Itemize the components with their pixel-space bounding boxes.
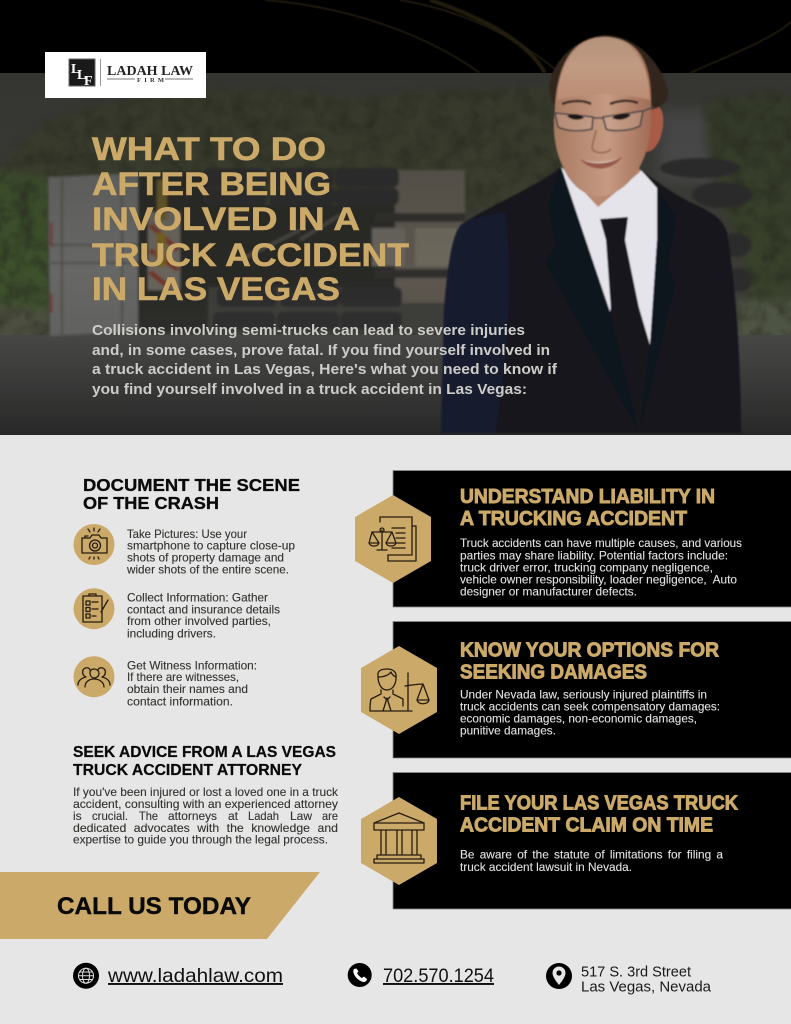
trailer rear doors — [48, 173, 140, 336]
text: seek advice body: The — [139, 809, 158, 823]
title: WHAT TO DO — [92, 131, 326, 167]
background photo: overturned truck — [0, 73, 791, 435]
neck — [564, 150, 640, 207]
icon: camera — [74, 524, 114, 565]
text: take pictures — [126, 527, 295, 576]
panel: hero — [0, 0, 791, 435]
heading: seeking damages: KNOW YOUR OPTIONS FOR — [460, 640, 720, 662]
heading: document the scene: OF THE CRASH — [83, 493, 219, 513]
intro paragraph: you find yourself involved in a truck accident in Las Vegas: — [92, 382, 527, 398]
text: file claim body: truck accident lawsuit in Nevada. — [460, 860, 632, 874]
heading: file claim — [460, 792, 738, 836]
lapels — [545, 167, 676, 430]
heading: understand liability: UNDERSTAND LIABILITY IN — [460, 486, 715, 508]
text: liability body: Truck accidents can have multiple causes, and various — [460, 536, 742, 550]
intro paragraph: a truck accident in Las Vegas, Here's what you need to know if — [92, 362, 557, 378]
necktie — [600, 217, 646, 402]
text: collect information: from other involved parties, — [127, 614, 271, 628]
text: seek advice body — [73, 785, 339, 847]
logo emblem: L — [77, 68, 86, 83]
text: damages body: punitive damages. — [460, 723, 556, 737]
icon: map pin — [546, 963, 572, 989]
heading: seek advice: SEEK ADVICE FROM A LAS VEGAS — [73, 744, 336, 761]
text: take pictures: shots of property damage and — [127, 551, 284, 565]
footer: phone — [348, 963, 494, 987]
icon: courthouse — [361, 797, 437, 885]
road — [0, 335, 791, 435]
text: get witness information — [127, 658, 257, 708]
text: collect information: contact and insurance details — [127, 602, 280, 616]
text: seek advice body: attorneys — [168, 809, 217, 823]
text: collect information — [127, 591, 280, 640]
panel: seek advice — [73, 744, 339, 847]
icon: phone — [348, 963, 372, 987]
icon: people — [74, 656, 114, 697]
text: collect information: including drivers. — [127, 626, 216, 640]
text: liability body: truck driver error, trucking company negligence, — [460, 560, 713, 574]
text: get witness information: Get Witness Information: — [127, 658, 257, 672]
text: damages body — [460, 688, 720, 737]
text: liability body — [460, 536, 742, 598]
panel: understand liability — [355, 470, 791, 607]
text: seek advice body: accident, consulting with an experienced attorney — [73, 797, 338, 811]
title: TRUCK ACCIDENT — [92, 237, 410, 273]
face — [554, 37, 651, 196]
footer: address: Las Vegas, Nevada — [581, 979, 712, 996]
heading: file claim: ACCIDENT CLAIM ON TIME — [460, 814, 713, 836]
text: liability body: designer or manufacturer defects. — [460, 584, 637, 598]
intro paragraph: Collisions involving semi-trucks can lead to severe injuries — [92, 323, 525, 339]
text: get witness information: contact information. — [127, 694, 233, 708]
heading: file claim: FILE YOUR LAS VEGAS TRUCK — [460, 792, 738, 814]
ear — [646, 105, 663, 152]
heading: understand liability — [460, 486, 715, 530]
text: seek advice body: crucial. — [92, 809, 128, 823]
title: AFTER BEING — [92, 166, 331, 202]
icon: globe — [73, 963, 99, 989]
text: get witness information: If there are witnesses, — [127, 670, 239, 684]
left sleeve highlight — [441, 212, 509, 433]
hair — [549, 35, 668, 110]
heading: seeking damages — [460, 640, 720, 684]
title: INVOLVED IN A — [92, 201, 360, 237]
attorney portrait — [441, 35, 741, 433]
call to action banner — [0, 872, 320, 939]
heading: document the scene — [83, 475, 300, 513]
intro paragraph: and, in some cases, prove fatal. If you find yourself involved in — [92, 343, 550, 359]
footer: website: www.ladahlaw.com — [107, 965, 283, 987]
chassis and tanker — [138, 170, 465, 332]
text: collect information: Collect Information: Gather — [127, 591, 268, 605]
sky and tree line — [0, 84, 791, 420]
text: seek advice body: are — [322, 809, 338, 823]
text: damages body: economic damages, non-economic damages, — [460, 712, 697, 726]
panel: document the scene — [74, 475, 300, 708]
suit jacket — [441, 167, 741, 433]
text: take pictures: wider shots of the entire scene. — [126, 562, 289, 576]
text: liability body: vehicle owner responsibility, loader negligence, Auto — [460, 572, 737, 586]
text: damages body: truck accidents can seek compensatory damages: — [460, 700, 720, 714]
text: damages body: Under Nevada law, seriously injured plaintiffs in — [460, 688, 707, 702]
text: seek advice body: is — [73, 809, 82, 823]
icon: legal documents — [355, 495, 431, 583]
tires — [203, 158, 752, 330]
black header band with gold waves — [0, 0, 791, 73]
bald forehead — [557, 37, 650, 100]
icon: checklist — [74, 588, 114, 629]
text: seek advice body: Law — [290, 809, 312, 823]
eyes — [567, 113, 631, 120]
logo — [45, 52, 206, 98]
text: file claim body: Be aware of the statute of limitations for filing a — [460, 848, 723, 862]
logo emblem — [69, 59, 95, 89]
footer: website — [73, 963, 283, 989]
logo: FIRM — [137, 77, 164, 84]
text: seek advice body: dedicated advocates with the knowledge and — [73, 821, 338, 835]
text: seek advice body: at — [228, 809, 239, 823]
footer: address — [546, 963, 712, 996]
nose and mouth — [592, 130, 611, 153]
text: seek advice body: If you've been injured or lost a loved one in a truck — [73, 785, 339, 799]
footer: phone: 702.570.1254 — [383, 965, 494, 987]
heading: seek advice — [73, 744, 336, 779]
heading: understand liability: A TRUCKING ACCIDENT — [460, 508, 687, 530]
text: liability body: parties may share liability. Potential factors include: — [460, 548, 728, 562]
heading: seek advice: TRUCK ACCIDENT ATTORNEY — [73, 762, 302, 779]
title — [92, 131, 410, 307]
text: file claim body — [460, 848, 723, 874]
icon: attorney with scales — [361, 646, 437, 734]
glasses — [555, 107, 654, 131]
panel: file claim — [361, 772, 791, 909]
text: get witness information: obtain their names and — [127, 682, 248, 696]
logo emblem: F — [84, 74, 93, 89]
darkening overlay — [0, 73, 791, 435]
shirt — [561, 167, 657, 345]
text: seek advice body: Ladah — [248, 809, 279, 823]
panel: seeking damages — [361, 622, 791, 758]
logo: LADAH LAW — [107, 63, 194, 78]
footer: address: 517 S. 3rd Street — [581, 964, 692, 981]
intro paragraph — [92, 323, 557, 398]
text: seek advice body: expertise to guide you through the legal process. — [73, 833, 328, 847]
eyebrows — [562, 101, 638, 104]
title: IN LAS VEGAS — [92, 271, 340, 307]
heading: document the scene: DOCUMENT THE SCENE — [83, 475, 300, 495]
logo emblem: L — [71, 62, 80, 77]
call to action banner: CALL US TODAY — [57, 893, 251, 920]
heading: seeking damages: SEEKING DAMAGES — [460, 662, 647, 684]
text: take pictures: smartphone to capture close-up — [127, 539, 295, 553]
text: take pictures: Take Pictures: Use your — [127, 527, 247, 541]
